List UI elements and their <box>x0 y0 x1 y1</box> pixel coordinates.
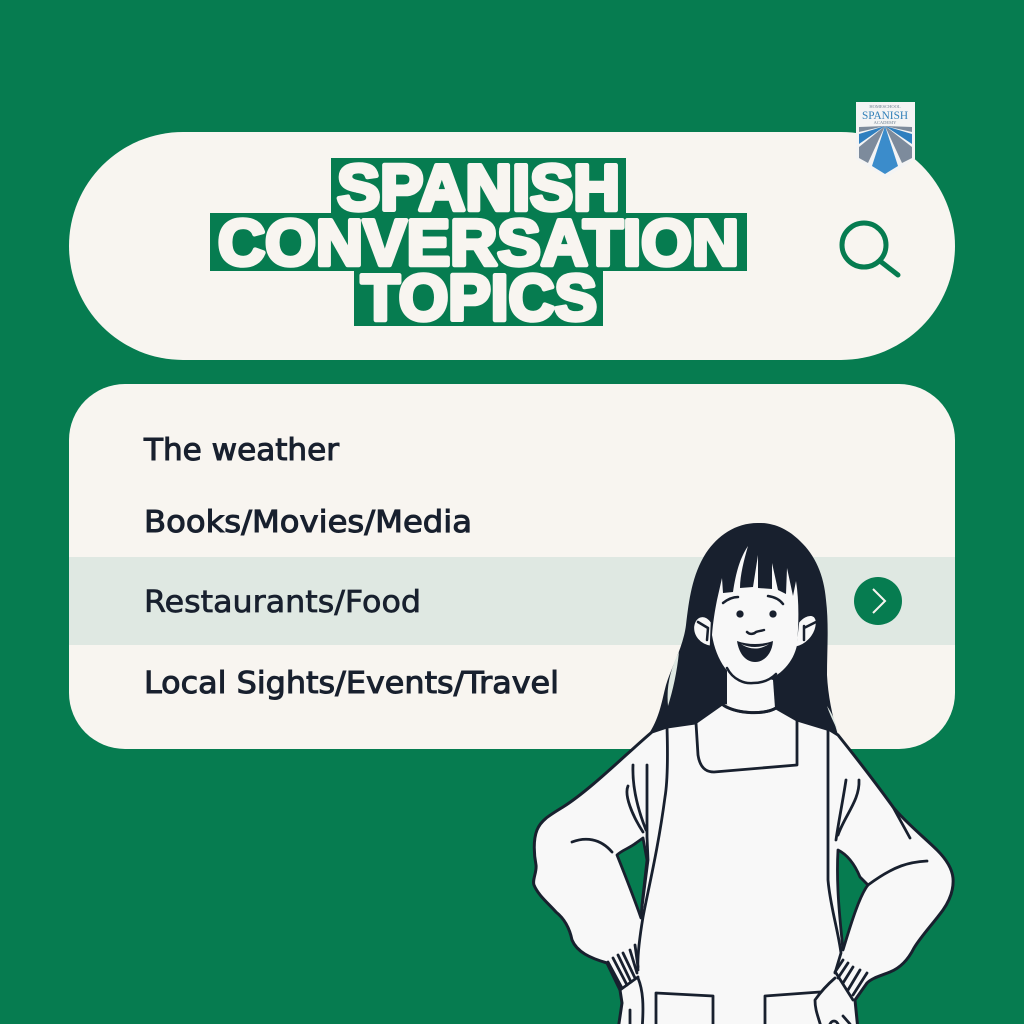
sleeve cuffs <box>608 945 867 1000</box>
neck <box>727 668 775 722</box>
title: TOPICS <box>361 261 597 334</box>
face with bangs <box>712 546 798 683</box>
hands <box>630 978 850 1024</box>
arm gap: left <box>617 838 647 918</box>
hair <box>650 523 838 735</box>
list item: Books/Movies/Media: Books/Movies/Media <box>144 505 472 540</box>
ear: left <box>693 616 712 647</box>
title: SPANISH <box>337 151 620 224</box>
ear: right <box>795 615 817 648</box>
list item: The weather: The weather <box>143 433 340 468</box>
arm gap: right <box>837 850 868 950</box>
panel: topic list <box>69 384 955 749</box>
list item: Restaurants/Food: Restaurants/Food <box>144 585 421 620</box>
title <box>210 151 747 334</box>
logo: Homeschool Spanish Academy shield: ACADEMY <box>874 120 897 125</box>
logo: Homeschool Spanish Academy shield: HOMESCHOOL <box>869 104 901 109</box>
title: CONVERSATION <box>218 206 739 279</box>
icon: chevron button <box>854 577 902 625</box>
illustration: smiling woman in apron <box>534 523 953 1024</box>
logo: Homeschool Spanish Academy shield <box>856 102 915 178</box>
logo: Homeschool Spanish Academy shield: SPANISH <box>862 108 908 122</box>
panel: title search bar <box>69 132 955 360</box>
collar <box>722 704 776 713</box>
body silhouette <box>534 704 953 1024</box>
list item: Local Sights/Events/Travel: Local Sights/Events/Travel <box>144 666 559 701</box>
face features <box>698 596 816 683</box>
mouth <box>737 641 773 662</box>
hair highlights <box>668 652 838 733</box>
icon: magnifying glass <box>842 223 898 275</box>
apron outlines <box>572 720 927 1024</box>
